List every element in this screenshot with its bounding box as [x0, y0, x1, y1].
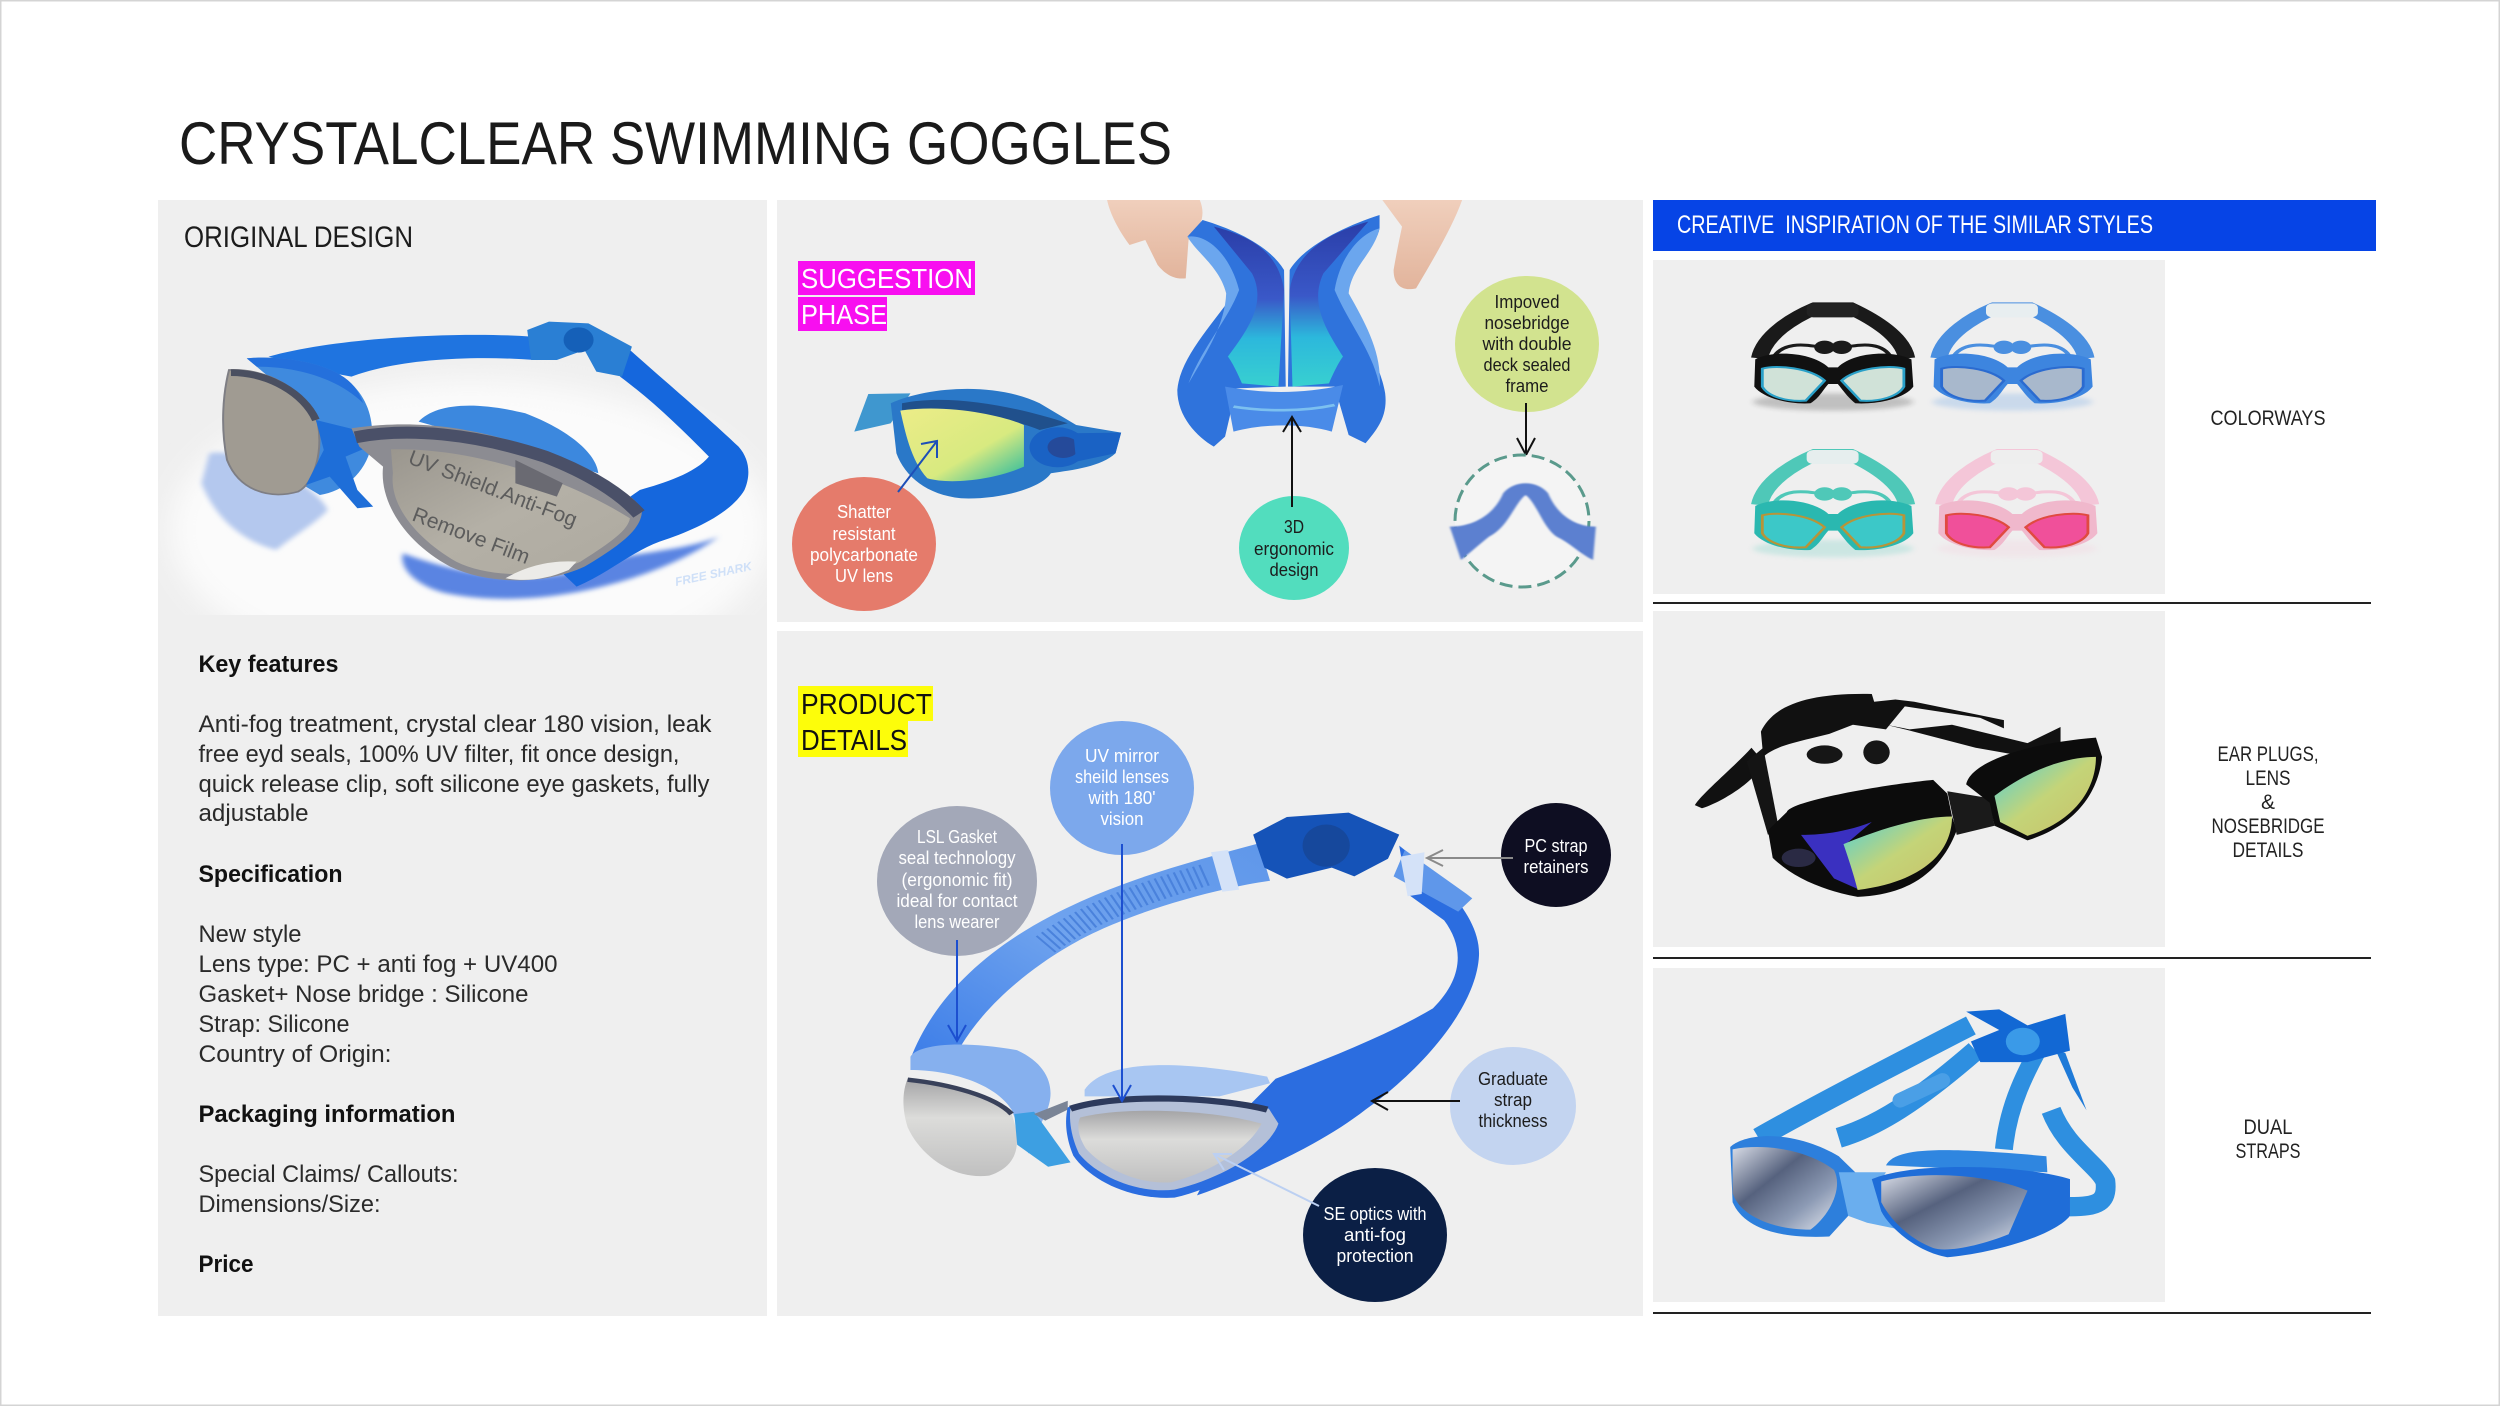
circle: improved nosebridge: with double	[1482, 334, 1572, 354]
image: black goggles with ear plugs	[1695, 694, 2102, 897]
text block: packaging information: Special Claims/ Callouts:	[198, 1161, 458, 1188]
circle: SE optics: protection	[1336, 1246, 1414, 1266]
arrow: to lens	[898, 441, 937, 492]
text block: key features: free eyd seals, 100% UV filter, fit once design,	[198, 741, 680, 768]
circle: LSL gasket	[877, 806, 1037, 956]
goggles: left half	[1177, 220, 1286, 447]
header bar: creative inspiration	[1653, 200, 2376, 251]
label: ear plugs, lens and nosebridge details: DETAILS	[2232, 839, 2304, 862]
text block: packaging information: Packaging information	[198, 1101, 456, 1128]
circle: shatter resistant lens	[792, 477, 936, 611]
circle: improved nosebridge: Impoved	[1494, 292, 1560, 312]
text block: specification: Lens type: PC + anti fog + UV400	[198, 951, 558, 978]
circle: SE optics: SE optics with	[1324, 1204, 1426, 1224]
label: ear plugs, lens and nosebridge details: &	[2261, 791, 2275, 814]
arrow: to anti-fog lens	[1214, 1154, 1319, 1206]
label: dual straps: STRAPS	[2236, 1140, 2300, 1163]
circle: SE optics	[1303, 1168, 1447, 1302]
heading: product details: PRODUCT	[801, 689, 932, 721]
photo: blue goggles	[178, 322, 762, 615]
text block: packaging information: Price	[198, 1251, 254, 1278]
circle: graduate strap thickness: Graduate	[1478, 1069, 1548, 1089]
image: blue dual strap goggles	[1730, 1009, 2106, 1257]
heading: suggestion phase: PHASE	[801, 299, 887, 330]
image: blue goggles with strap	[903, 813, 1479, 1198]
image: side view goggle with iridescent lens	[854, 389, 1121, 498]
circle: LSL gasket: seal technology	[898, 848, 1016, 868]
label: dual straps	[2236, 1116, 2300, 1163]
circle: shatter resistant lens: polycarbonate	[810, 545, 918, 565]
panel: dual straps	[1653, 968, 2300, 1302]
arrow: to bridge	[1283, 417, 1301, 507]
goggle: black	[1753, 303, 1913, 411]
circle: improved nosebridge: nosebridge	[1484, 313, 1570, 333]
image: nosebridge detail in dashed circle	[1450, 455, 1596, 587]
circle: improved nosebridge: deck sealed	[1484, 355, 1570, 375]
text block: specification: Specification	[198, 861, 342, 888]
heading: original design: ORIGINAL DESIGN	[184, 221, 413, 254]
circle: UV mirror lenses: sheild lenses	[1075, 767, 1169, 787]
circle: improved nosebridge: frame	[1506, 376, 1548, 396]
image: four colorway goggles	[1753, 303, 2097, 557]
hand: right thumb	[1382, 200, 1462, 289]
strap logo: FREE SHARK	[674, 559, 754, 589]
circle: 3D ergonomic design: ergonomic	[1254, 539, 1334, 559]
text block: specification: New style	[198, 921, 302, 948]
circle: improved nosebridge	[1455, 276, 1599, 412]
goggle: teal	[1753, 450, 1913, 557]
arrow: to mirror lens	[1113, 844, 1131, 1101]
goggles: right half	[1288, 215, 1386, 443]
heading: suggestion phase	[798, 261, 975, 331]
label: ear plugs, lens and nosebridge details: LENS	[2246, 767, 2290, 790]
text block: specification	[198, 861, 558, 1068]
arrow: to retainer	[1427, 850, 1513, 866]
circle: PC strap retainers	[1501, 803, 1611, 907]
label: ear plugs, lens and nosebridge details	[2212, 743, 2324, 862]
arrow: to gasket	[948, 940, 966, 1041]
arrow: to strap	[1372, 1092, 1460, 1110]
heading: product details: DETAILS	[801, 725, 907, 757]
title: CRYSTALCLEAR SWIMMING GOGGLES	[179, 110, 1172, 177]
circle: LSL gasket: (ergonomic fit)	[902, 870, 1012, 890]
panel: product details	[777, 631, 1643, 1316]
goggle: blue	[1932, 303, 2093, 411]
hand: left fingers	[1107, 200, 1202, 279]
goggle: pink	[1937, 450, 2097, 557]
label: dual straps: DUAL	[2244, 1116, 2292, 1139]
header bar: creative inspiration: CREATIVE INSPIRATION OF THE SIMILAR STYLES	[1677, 211, 2153, 239]
label: ear plugs, lens and nosebridge details: EAR PLUGS,	[2218, 743, 2318, 766]
text block: key features: quick release clip, soft silicone eye gaskets, fully	[198, 771, 710, 798]
text block: key features	[198, 651, 712, 827]
text block: packaging information	[198, 1101, 458, 1278]
heading: suggestion phase: SUGGESTION	[801, 263, 973, 294]
panel: colorways	[1653, 260, 2326, 594]
panel: suggestion phase	[777, 200, 1643, 622]
text block: specification: Gasket+ Nose bridge : Silicone	[198, 981, 528, 1008]
circle: LSL gasket: ideal for contact	[896, 891, 1018, 911]
circle: shatter resistant lens: UV lens	[835, 566, 893, 586]
label: ear plugs, lens and nosebridge details: NOSEBRIDGE	[2212, 815, 2324, 838]
circle: graduate strap thickness: thickness	[1478, 1111, 1548, 1131]
text block: key features: adjustable	[198, 800, 308, 827]
text block: key features: Key features	[198, 651, 338, 678]
text block: specification: Country of Origin:	[198, 1041, 392, 1068]
lens text: uv shield anti-fog: UV Shield.Anti-Fog	[405, 446, 580, 532]
circle: 3D ergonomic design	[1239, 496, 1349, 600]
circle: LSL gasket: lens wearer	[914, 912, 1000, 932]
circle: 3D ergonomic design: 3D	[1284, 517, 1304, 537]
circle: shatter resistant lens: resistant	[832, 524, 896, 544]
lens text: remove film: Remove Film	[409, 503, 533, 569]
image: hands holding folded goggles	[1107, 200, 1462, 447]
heading: product details	[798, 686, 933, 757]
text block: key features: Anti-fog treatment, crystal clear 180 vision, leak	[198, 711, 712, 738]
circle: UV mirror lenses	[1050, 721, 1194, 855]
circle: graduate strap thickness	[1450, 1047, 1576, 1165]
circle: PC strap retainers: retainers	[1524, 857, 1588, 877]
panel: ear plugs details	[1653, 611, 2324, 947]
circle: UV mirror lenses: vision	[1100, 809, 1144, 829]
circle: LSL gasket: LSL Gasket	[917, 827, 997, 847]
circle: PC strap retainers: PC strap	[1524, 836, 1588, 856]
text block: packaging information: Dimensions/Size:	[198, 1191, 380, 1218]
text block: specification: Strap: Silicone	[198, 1011, 350, 1038]
arrow: to nosebridge detail	[1517, 403, 1535, 455]
circle: 3D ergonomic design: design	[1270, 560, 1318, 580]
circle: graduate strap thickness: strap	[1494, 1090, 1532, 1110]
label: colorways: COLORWAYS	[2210, 407, 2326, 430]
circle: UV mirror lenses: with 180'	[1088, 788, 1156, 808]
panel: original design	[158, 200, 770, 1316]
circle: shatter resistant lens: Shatter	[837, 502, 891, 522]
circle: SE optics: anti-fog	[1344, 1225, 1406, 1245]
circle: UV mirror lenses: UV mirror	[1085, 746, 1159, 766]
